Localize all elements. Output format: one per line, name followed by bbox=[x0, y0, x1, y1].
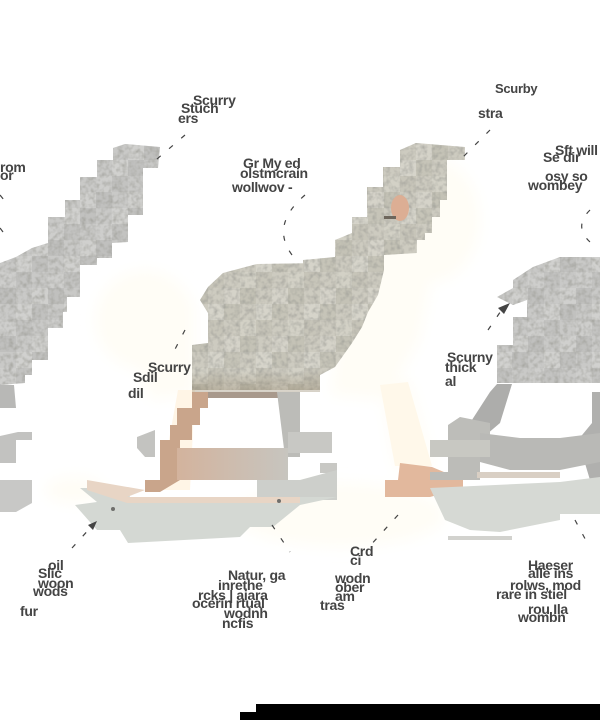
callout: top right: stra bbox=[478, 105, 503, 121]
callout: head centre: wollwov - bbox=[231, 179, 293, 195]
callout: bottom centre right: wodn bbox=[334, 570, 370, 586]
callout: bottom centre right: Crd bbox=[350, 543, 373, 559]
callout: bottom centre: Natur, ga bbox=[228, 567, 286, 583]
cream leg bbox=[380, 382, 432, 466]
right sheep body bbox=[497, 257, 600, 383]
callout: far right: osy so bbox=[545, 168, 588, 184]
left sheep ghost bbox=[0, 144, 160, 512]
callout: bottom right bbox=[496, 520, 590, 625]
centre sheep body bbox=[192, 262, 384, 390]
centre sheep belly shade bbox=[192, 340, 352, 392]
callout: centre right: al bbox=[445, 373, 456, 389]
callout: bottom centre bbox=[192, 525, 290, 631]
callout: head centre bbox=[231, 155, 308, 255]
callout: head centre: Gr My ed bbox=[243, 155, 301, 171]
left sheep body bbox=[0, 144, 160, 385]
right sheep shadow bbox=[430, 477, 600, 532]
callout: bottom far left: oil bbox=[48, 557, 63, 573]
callout: centre left bbox=[128, 330, 191, 401]
callout: bottom centre right: ober bbox=[335, 579, 365, 595]
left sheep leg bbox=[0, 385, 16, 408]
callout: far left bbox=[0, 159, 26, 232]
black footer bar bbox=[240, 704, 600, 720]
right sheep foot bbox=[430, 457, 480, 480]
callout: top right bbox=[460, 81, 538, 160]
callout: bottom centre: wodnh bbox=[223, 605, 268, 621]
right sheep rocker band bbox=[430, 440, 490, 457]
pink foot bbox=[385, 463, 463, 497]
right sheep lower strip bbox=[448, 536, 512, 540]
callout: bottom far left: woon bbox=[37, 575, 73, 591]
callout: bottom centre: ocerin rtual bbox=[192, 595, 265, 611]
callout: bottom far left: fur bbox=[20, 603, 39, 619]
centre sheep neck and head bbox=[303, 143, 465, 270]
callout: head centre: olstmcrain bbox=[240, 165, 308, 181]
callout: top left: ers bbox=[178, 110, 199, 126]
callout: centre left: Sdil bbox=[133, 369, 157, 385]
centre sheep ear bbox=[391, 195, 409, 221]
callout: bottom centre right: am bbox=[335, 588, 355, 604]
callout: bottom centre: ncfis bbox=[222, 615, 254, 631]
callout: bottom right: wombn bbox=[517, 609, 566, 625]
rocker right of centre bbox=[288, 432, 337, 473]
centre rocker shadow bbox=[75, 488, 337, 543]
arrowhead: centre right bbox=[498, 303, 510, 314]
callout: bottom far left: Slic bbox=[38, 565, 62, 581]
cream halo behind centre sheep bbox=[45, 158, 480, 547]
centre rocker base gray bbox=[257, 470, 337, 500]
right sheep rocker curl bbox=[448, 417, 490, 440]
callout: centre right: thick bbox=[445, 359, 477, 375]
callout: bottom far left bbox=[20, 521, 97, 619]
right sheep strip bbox=[477, 472, 560, 478]
centre sheep eye bbox=[384, 216, 396, 219]
callout: centre left: dil bbox=[128, 385, 143, 401]
callout: bottom right: rolws, mod bbox=[510, 577, 581, 593]
centre rocker bar bbox=[177, 448, 288, 480]
callout: bottom far left: wods bbox=[32, 583, 68, 599]
callout: top left: Stuch bbox=[181, 100, 218, 116]
centre sheep lower strip bbox=[192, 392, 300, 398]
right sheep ghost bbox=[430, 257, 600, 540]
left sheep rocker bbox=[0, 432, 32, 463]
centre sheep back leg bbox=[277, 392, 300, 457]
callout: bottom centre right: tras bbox=[320, 597, 345, 613]
centre sheep front leg bbox=[145, 392, 208, 492]
callout: centre right: Scurny bbox=[447, 349, 493, 365]
right sheep rocker centre bbox=[480, 433, 600, 470]
callout: bottom centre: rcks | aiara bbox=[198, 587, 268, 603]
centre rocker curl bbox=[137, 430, 155, 457]
callout: bottom right: alle ins bbox=[528, 565, 574, 581]
right sheep far leg bbox=[578, 392, 600, 480]
callout: bottom right: Haeser bbox=[528, 557, 574, 573]
callout: far right: Se dir bbox=[543, 149, 581, 165]
callout: top right: Scurby bbox=[495, 81, 538, 96]
callout: far right: wombey bbox=[527, 177, 583, 193]
callout: bottom right: rare in stiel bbox=[496, 586, 567, 602]
centre rocker band bbox=[87, 480, 300, 503]
callout: top left bbox=[150, 92, 236, 165]
cream front leg glow bbox=[160, 390, 195, 490]
callout: bottom right: rou Ila bbox=[528, 601, 568, 617]
left sheep base bbox=[0, 480, 32, 512]
centre sheep bbox=[75, 143, 465, 543]
callout: top left: Scurry bbox=[193, 92, 236, 108]
right sheep near leg bbox=[448, 384, 512, 480]
callout: far right bbox=[527, 142, 598, 248]
callout: far left: or bbox=[0, 167, 14, 183]
callout: bottom centre: inrethe bbox=[218, 577, 263, 593]
centre rocker screws bbox=[111, 499, 281, 511]
callout: far right: Sft will bbox=[555, 142, 598, 158]
callout: bottom centre right: ci bbox=[350, 552, 361, 568]
callout: far left: rom bbox=[0, 159, 26, 175]
callout: bottom centre right bbox=[320, 515, 398, 613]
callout: centre right bbox=[445, 303, 510, 389]
callout: centre left: Scurry bbox=[148, 359, 191, 375]
arrowhead: bottom left bbox=[88, 521, 97, 530]
